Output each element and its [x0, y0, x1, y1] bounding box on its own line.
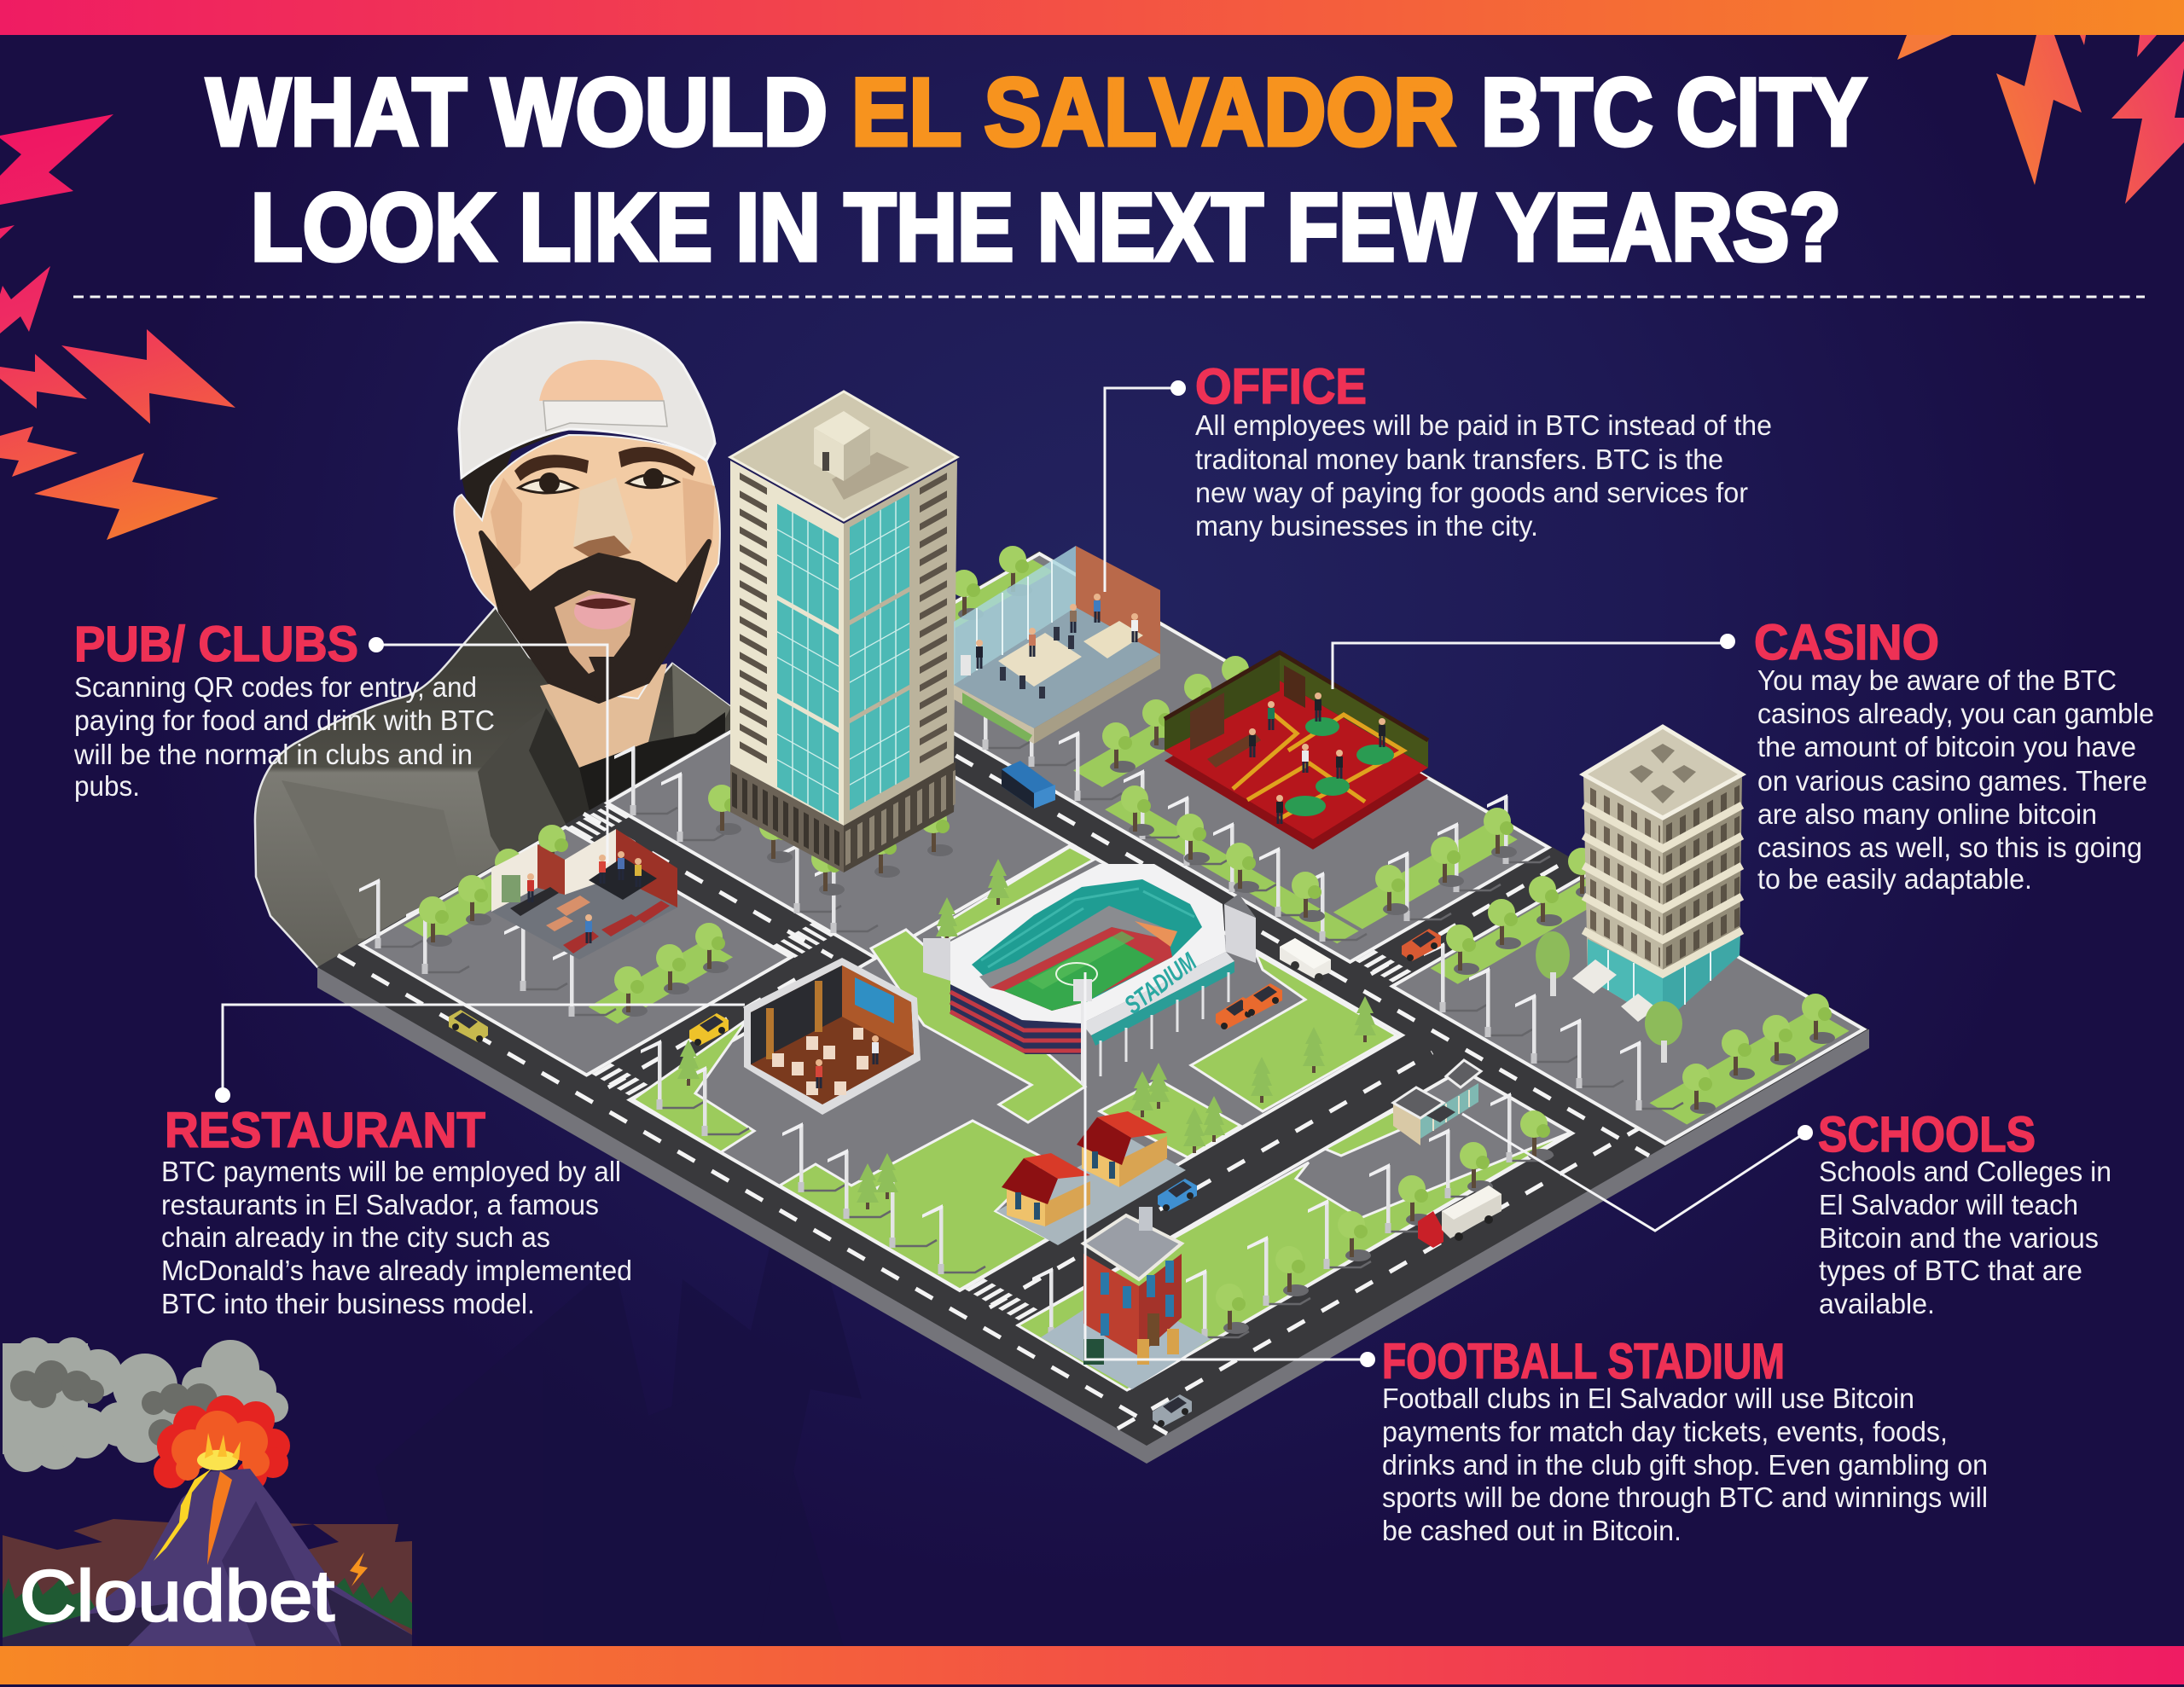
panel: office: [1195, 359, 1772, 542]
text: football stadium: sports will be done through BTC and winnings will: [1382, 1481, 1988, 1513]
shirt: [255, 607, 768, 1023]
text: casino: are also many online bitcoin: [1757, 798, 2097, 830]
text: office: traditonal money bank transfers. BTC is the: [1195, 443, 1723, 475]
isometric city: [317, 391, 1869, 1464]
lightning bolts right: [1897, 35, 2184, 204]
text: casino: the amount of bitcoin you have: [1757, 731, 2136, 762]
text: football stadium: drinks and in the club gift shop. Even gambling on: [1382, 1449, 1988, 1481]
panel: football stadium: [1382, 1334, 1988, 1546]
trees: [419, 546, 1835, 1334]
eruption: [154, 1395, 290, 1491]
text: casino: to be easily adaptable.: [1757, 863, 2032, 895]
vehicles: [449, 761, 1502, 1427]
volcano illustration: [3, 1337, 412, 1646]
street lamps: [359, 680, 1683, 1339]
portrait: man in white cap: [255, 322, 768, 1023]
face: [454, 435, 720, 699]
panel: schools: [1818, 1107, 2111, 1319]
title: WHAT WOULD: [206, 59, 828, 165]
callout leader lines: [223, 388, 1805, 1359]
roof: [730, 391, 957, 520]
building: residential tower: [1536, 727, 1742, 1063]
cap: [459, 322, 715, 478]
text: casino: on various casino games. There: [1757, 765, 2147, 797]
faint background bolts: [375, 1143, 862, 1680]
text: football stadium: Football clubs in El Salvador will use Bitcoin: [1382, 1383, 1914, 1414]
building: office tower: [730, 391, 957, 872]
text: casino: casinos already, you can gamble: [1757, 698, 2154, 729]
text: pub and clubs: will be the normal in clubs and in: [73, 739, 473, 770]
text: office: new way of paying for goods and services for: [1195, 477, 1748, 508]
eyes and brows: [519, 479, 577, 493]
right face: [844, 461, 957, 826]
road dashes: [338, 677, 1649, 1434]
building: school: [1393, 1060, 1481, 1145]
city blocks and green areas: [361, 554, 1864, 1421]
title: LOOK LIKE IN THE NEXT FEW YEARS?: [251, 174, 1841, 281]
lava: [141, 1469, 212, 1574]
hair: [462, 429, 569, 525]
text: football stadium: be cashed out in Bitcoin.: [1382, 1515, 1682, 1546]
platform edge: [317, 967, 1869, 1464]
top gradient bar: [0, 0, 2184, 35]
panel: pub and clubs: [73, 617, 495, 802]
text: restaurant: BTC into their business model.: [161, 1288, 535, 1319]
title: BTC CITY: [1481, 59, 1867, 165]
text: casino: casinos as well, so this is going: [1757, 832, 2142, 863]
heading: schools: SCHOOLS: [1818, 1107, 2036, 1162]
heading: office: OFFICE: [1195, 359, 1367, 415]
text: schools: Bitcoin and the various: [1819, 1222, 2099, 1254]
logo: Cloudbet wordmark: Cloudbet: [20, 1556, 334, 1636]
text: schools: Schools and Colleges in: [1819, 1156, 2111, 1187]
stadium canopy: [1082, 952, 1234, 1035]
road surface: [317, 551, 1868, 1446]
smoke: [3, 1337, 288, 1472]
bottom gradient bar: [0, 1646, 2184, 1684]
text: pub and clubs: Scanning QR codes for entry, and: [74, 671, 477, 703]
text: schools: [1819, 1156, 2111, 1319]
building: red brick: [1041, 1207, 1211, 1389]
text: office: many businesses in the city.: [1195, 510, 1538, 542]
text: restaurant: [161, 1156, 632, 1319]
floodlight: [1081, 994, 1086, 1085]
lightning bolts left: [0, 114, 235, 540]
heading: casino: CASINO: [1754, 615, 1939, 670]
buildings: houses: [996, 1111, 1186, 1245]
mouth: [574, 594, 632, 629]
forest: [3, 1574, 412, 1642]
heading: football stadium: FOOTBALL STADIUM: [1382, 1334, 1785, 1389]
text: pub and clubs: paying for food and drink with BTC: [74, 704, 495, 736]
text: restaurant: McDonald’s have already implemented: [161, 1255, 632, 1286]
text: restaurant: restaurants in El Salvador, a famous: [161, 1189, 599, 1220]
panel: restaurant: [161, 1103, 632, 1319]
text: schools: types of BTC that are: [1819, 1255, 2082, 1286]
text: pub and clubs: [73, 671, 495, 802]
title: EL SALVADOR: [851, 59, 1455, 165]
text: office: All employees will be paid in BTC instead of the: [1195, 409, 1772, 441]
base: [730, 764, 844, 872]
text: pub and clubs: pubs.: [74, 770, 140, 802]
building: casino: [1165, 652, 1428, 849]
text: schools: El Salvador will teach: [1819, 1189, 2078, 1220]
heading: restaurant: RESTAURANT: [165, 1103, 485, 1158]
building: restaurant: [744, 958, 921, 1115]
text: football stadium: payments for match day tickets, events, foods,: [1382, 1416, 1948, 1447]
text: restaurant: BTC payments will be employed by all: [161, 1156, 621, 1187]
building: stadium: STADIUM: [1119, 948, 1202, 1020]
text: schools: available.: [1819, 1288, 1935, 1319]
left face: [730, 461, 844, 826]
callout dots: [215, 380, 1813, 1367]
building: stadium: [923, 864, 1256, 1085]
heading: pub and clubs: PUB/ CLUBS: [74, 617, 358, 672]
title: [206, 59, 1867, 281]
text: football stadium: [1382, 1383, 1988, 1546]
volcano cone: [3, 1469, 412, 1646]
crosswalks: [386, 668, 1511, 1316]
land: [3, 1519, 412, 1646]
text: casino: [1757, 664, 2154, 895]
text: restaurant: chain already in the city such as: [161, 1221, 550, 1253]
text: casino: You may be aware of the BTC: [1757, 664, 2117, 696]
panel: casino: [1754, 615, 2154, 895]
beard: [481, 533, 709, 701]
text: office: [1195, 409, 1772, 542]
neck and tee: [540, 664, 667, 768]
building: glass office: [954, 546, 1160, 744]
building: bar: [491, 829, 677, 959]
